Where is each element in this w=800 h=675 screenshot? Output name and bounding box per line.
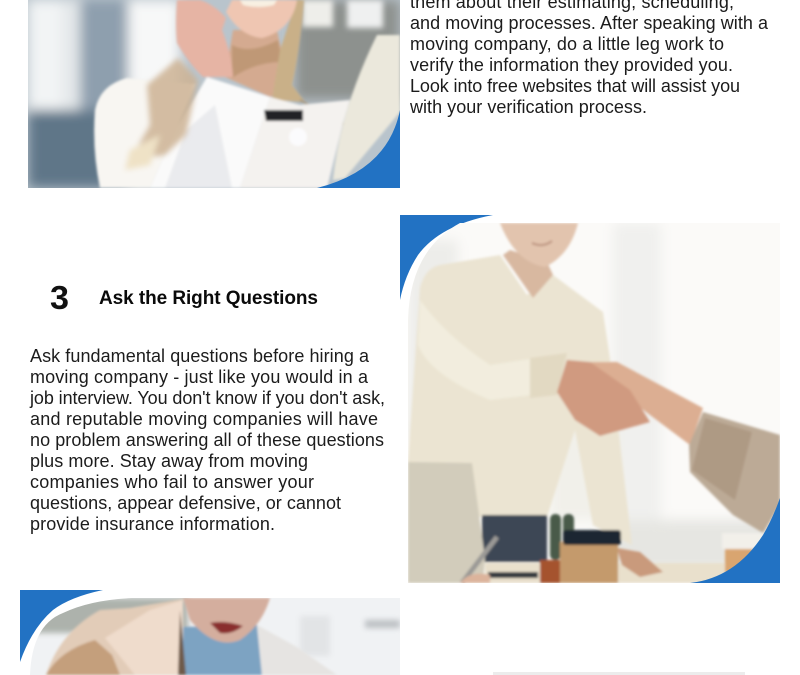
photo: woman on the phone with a tablet — [28, 0, 400, 188]
text block: ask the right questions: and reputable moving companies will have — [30, 409, 378, 429]
text block: ask the right questions: job interview. You don't know if you don't ask, — [29, 388, 385, 408]
text block: verify the information: Look into free websites that will assist you — [410, 76, 740, 96]
heading: ask the right questions: Ask the Right Questions — [99, 288, 318, 309]
text block: verify the information: and moving processes. After speaking with a — [410, 13, 769, 33]
text block: ask the right questions: no problem answering all of these questions — [30, 430, 384, 450]
photo: handshake across a desk — [400, 215, 780, 583]
text block: verify the information: verify the information they provided you. — [410, 55, 733, 75]
text block: ask the right questions: plus more. Stay away from moving — [30, 451, 308, 471]
blue corner accent top left — [400, 215, 493, 300]
text block: verify the information: with your verification process. — [409, 97, 647, 117]
text block: verify the information: moving company, do a little leg work to — [410, 34, 724, 54]
next step heading, clipped by the page edge — [493, 672, 745, 675]
blue corner accent bottom right — [690, 498, 780, 583]
text block: ask the right questions: provide insurance information. — [30, 514, 275, 534]
text block: verify the information — [409, 0, 769, 117]
blue corner accent — [20, 590, 103, 662]
text block: ask the right questions: questions, appear defensive, or cannot — [30, 493, 341, 513]
step number 3: 3 — [50, 279, 69, 316]
text block: ask the right questions: moving company - just like you would in a — [30, 367, 369, 387]
text block: ask the right questions — [29, 346, 385, 534]
text block: ask the right questions: companies who fail to answer your — [30, 472, 314, 492]
blue corner accent — [317, 110, 400, 188]
photo: woman in a beige jacket writing — [20, 590, 400, 675]
text block: ask the right questions: Ask fundamental questions before hiring a — [30, 346, 370, 366]
